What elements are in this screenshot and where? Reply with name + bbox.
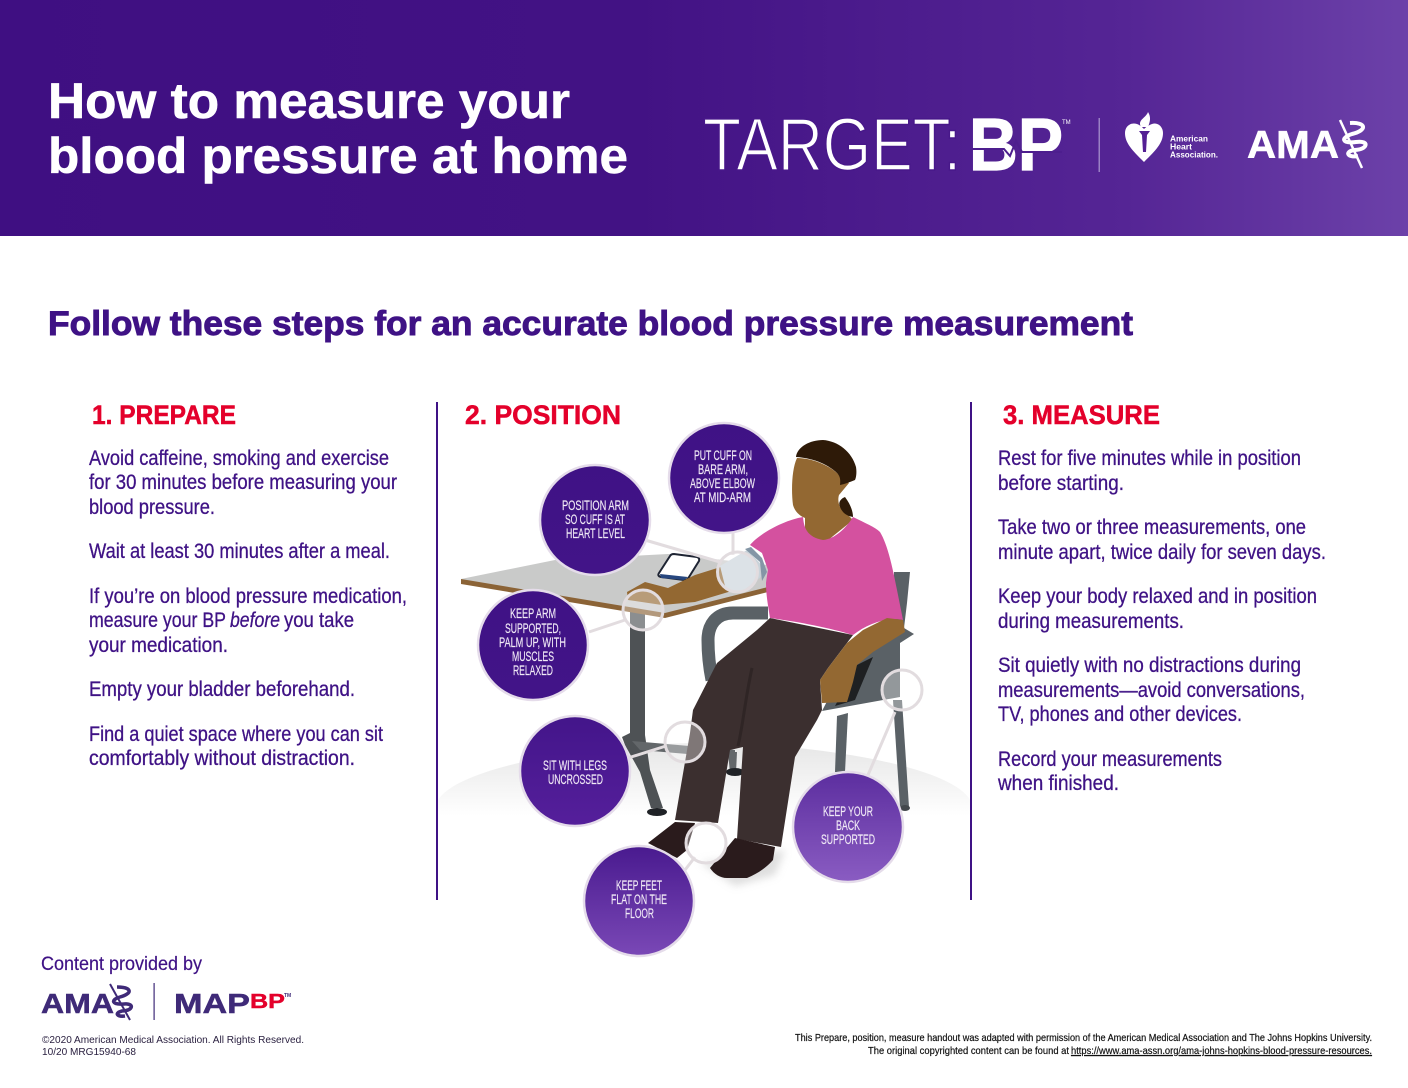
text block: measure steps: before starting.	[998, 472, 1124, 495]
text block: prepare steps: your medication.	[89, 634, 228, 657]
blood pressure monitor	[658, 554, 699, 580]
text block: measure steps: TV, phones and other devices.	[998, 703, 1242, 726]
callout: keep back supported: KEEP YOUR	[823, 804, 873, 819]
chair seat cushion	[835, 657, 873, 706]
chair legs	[835, 713, 848, 772]
highlight lenses and connector lines	[589, 533, 922, 870]
attribution note: The original copyrighted content can be found at	[868, 1045, 1069, 1057]
heading: measure: 3. MEASURE	[1003, 400, 1160, 430]
callout: put cuff on bare arm: AT MID-ARM	[694, 490, 751, 505]
callout: sit with legs uncrossed: SIT WITH LEGS	[543, 758, 607, 773]
callout: keep arm supported: KEEP ARM	[510, 606, 556, 621]
text block: prepare steps: Empty your bladder beforehand.	[89, 678, 355, 701]
logo: AMA: AMA	[41, 988, 114, 1019]
pink shirt	[750, 517, 903, 635]
chair back	[822, 572, 914, 711]
logo: MAP BP	[174, 988, 291, 1019]
text block: prepare steps: comfortably without distraction.	[89, 747, 355, 770]
callout: put cuff on bare arm: PUT CUFF ON	[694, 448, 752, 463]
callout: keep arm supported	[478, 590, 588, 700]
title: blood pressure at home	[48, 128, 628, 184]
text block: prepare steps: Avoid caffeine, smoking and exercise	[89, 447, 389, 470]
text block: measure steps: Take two or three measurements, one	[998, 516, 1306, 539]
callout: keep feet flat: FLOOR	[625, 906, 654, 921]
text block: measure steps: Keep your body relaxed and in position	[998, 585, 1317, 608]
title: How to measure your	[48, 73, 570, 129]
text block: measure steps	[997, 447, 1326, 795]
callout: position arm: SO CUFF IS AT	[565, 512, 625, 527]
header banner	[0, 0, 1408, 236]
callout: keep back supported: SUPPORTED	[821, 832, 875, 847]
callout: keep arm supported: RELAXED	[513, 663, 553, 678]
text block: prepare steps	[89, 447, 407, 770]
trousers	[675, 618, 853, 847]
text block: prepare steps: for 30 minutes before measuring your	[89, 471, 397, 494]
callout: keep feet flat	[584, 846, 694, 956]
shoe shadow	[700, 850, 785, 886]
logo: AMA	[1247, 120, 1366, 168]
text block: prepare steps: If you’re on blood pressure medication,	[89, 585, 407, 608]
logo divider	[154, 983, 155, 1020]
panel: position	[436, 400, 972, 956]
hair	[796, 440, 856, 485]
logo: Target BP: BP	[969, 103, 1063, 186]
chair	[708, 572, 914, 811]
callout: put cuff on bare arm: ABOVE ELBOW	[690, 476, 755, 491]
text block: prepare steps: blood pressure.	[89, 496, 215, 519]
column divider left	[436, 402, 438, 900]
text block: measure steps: minute apart, twice daily for seven days.	[998, 541, 1326, 564]
callout: put cuff on bare arm: BARE ARM,	[698, 462, 748, 477]
shoes	[648, 822, 695, 858]
heading: position: 2. POSITION	[465, 400, 621, 430]
logo: MAP BP: BP	[250, 991, 285, 1013]
illustration: table, chair and seated person	[461, 440, 914, 886]
logo: American Heart Association: Heart	[1170, 142, 1192, 152]
callout: keep arm supported: MUSCLES	[512, 649, 554, 664]
text block: measure steps: Sit quietly with no distractions during	[998, 654, 1301, 677]
text block: prepare steps: Find a quiet space where you can sit	[89, 723, 383, 746]
copyright	[42, 1034, 304, 1058]
logo: Target BP: TM	[1062, 120, 1071, 126]
blood pressure cuff	[720, 550, 761, 593]
logo: AMA: AMA	[1247, 124, 1339, 167]
callout: position arm: POSITION ARM	[562, 498, 629, 513]
panel: prepare	[89, 400, 407, 770]
text block: prepare steps: Wait at least 30 minutes after a meal.	[89, 540, 390, 563]
person	[627, 440, 905, 886]
callout: position arm: HEART LEVEL	[566, 526, 625, 541]
copyright: ©2020 American Medical Association. All Rights Reserved.	[42, 1034, 304, 1046]
title	[48, 73, 628, 184]
attribution note	[795, 1032, 1372, 1057]
logo: American Heart Association: American	[1170, 134, 1208, 144]
text block: measure steps: when finished.	[997, 772, 1119, 795]
footer: content provided by: Content provided by	[41, 954, 202, 975]
callout: keep arm supported: SUPPORTED,	[505, 621, 561, 636]
chair arm rest	[708, 613, 768, 680]
copyright: 10/20 MRG15940-68	[42, 1046, 136, 1058]
section heading: Follow these steps for an accurate blood pressure measurement	[48, 305, 1133, 343]
panel: measure	[997, 400, 1326, 795]
text block: measure steps: Rest for five minutes while in position	[998, 447, 1301, 470]
attribution note: https://www.ama-assn.org/ama-johns-hopkins-blood-pressure-resources.	[1071, 1045, 1372, 1057]
column divider right	[970, 402, 972, 900]
logo: American Heart Association	[1125, 112, 1218, 162]
ponytail	[839, 497, 853, 517]
callout: sit with legs uncrossed: UNCROSSED	[548, 772, 603, 787]
logo: American Heart Association: Association.	[1170, 150, 1218, 160]
text block: prepare steps: you take	[284, 609, 354, 632]
table	[461, 554, 768, 816]
logo: AMA	[41, 984, 131, 1020]
callout: keep back supported	[793, 772, 903, 882]
callout: keep arm supported: PALM UP, WITH	[499, 635, 566, 650]
text block: measure steps: measurements—avoid conversations,	[998, 679, 1305, 702]
far arm and hand	[820, 618, 905, 703]
logo: Target BP: TARGET:	[703, 103, 961, 186]
callout: keep feet flat: KEEP FEET	[616, 878, 662, 893]
callout: keep feet flat: FLAT ON THE	[611, 892, 667, 907]
callout: keep back supported: BACK	[836, 818, 860, 833]
callout: put cuff on bare arm	[669, 423, 779, 533]
floor shadow	[438, 743, 970, 840]
logo: MAP BP: TM	[284, 993, 291, 999]
text block: measure steps: during measurements.	[998, 610, 1184, 633]
text block: prepare steps: before	[230, 609, 280, 632]
text block: prepare steps: measure your BP	[89, 609, 226, 632]
heading: prepare: 1. PREPARE	[92, 400, 236, 430]
footer: content provided by	[41, 954, 304, 1058]
callout: sit with legs uncrossed	[520, 716, 630, 826]
neck and face	[792, 458, 853, 545]
near arm and hand	[627, 565, 735, 605]
text block: measure steps: Record your measurements	[998, 748, 1222, 771]
logo divider	[1098, 118, 1100, 172]
callout: position arm	[540, 465, 650, 575]
logo: MAP BP: MAP	[174, 988, 250, 1019]
